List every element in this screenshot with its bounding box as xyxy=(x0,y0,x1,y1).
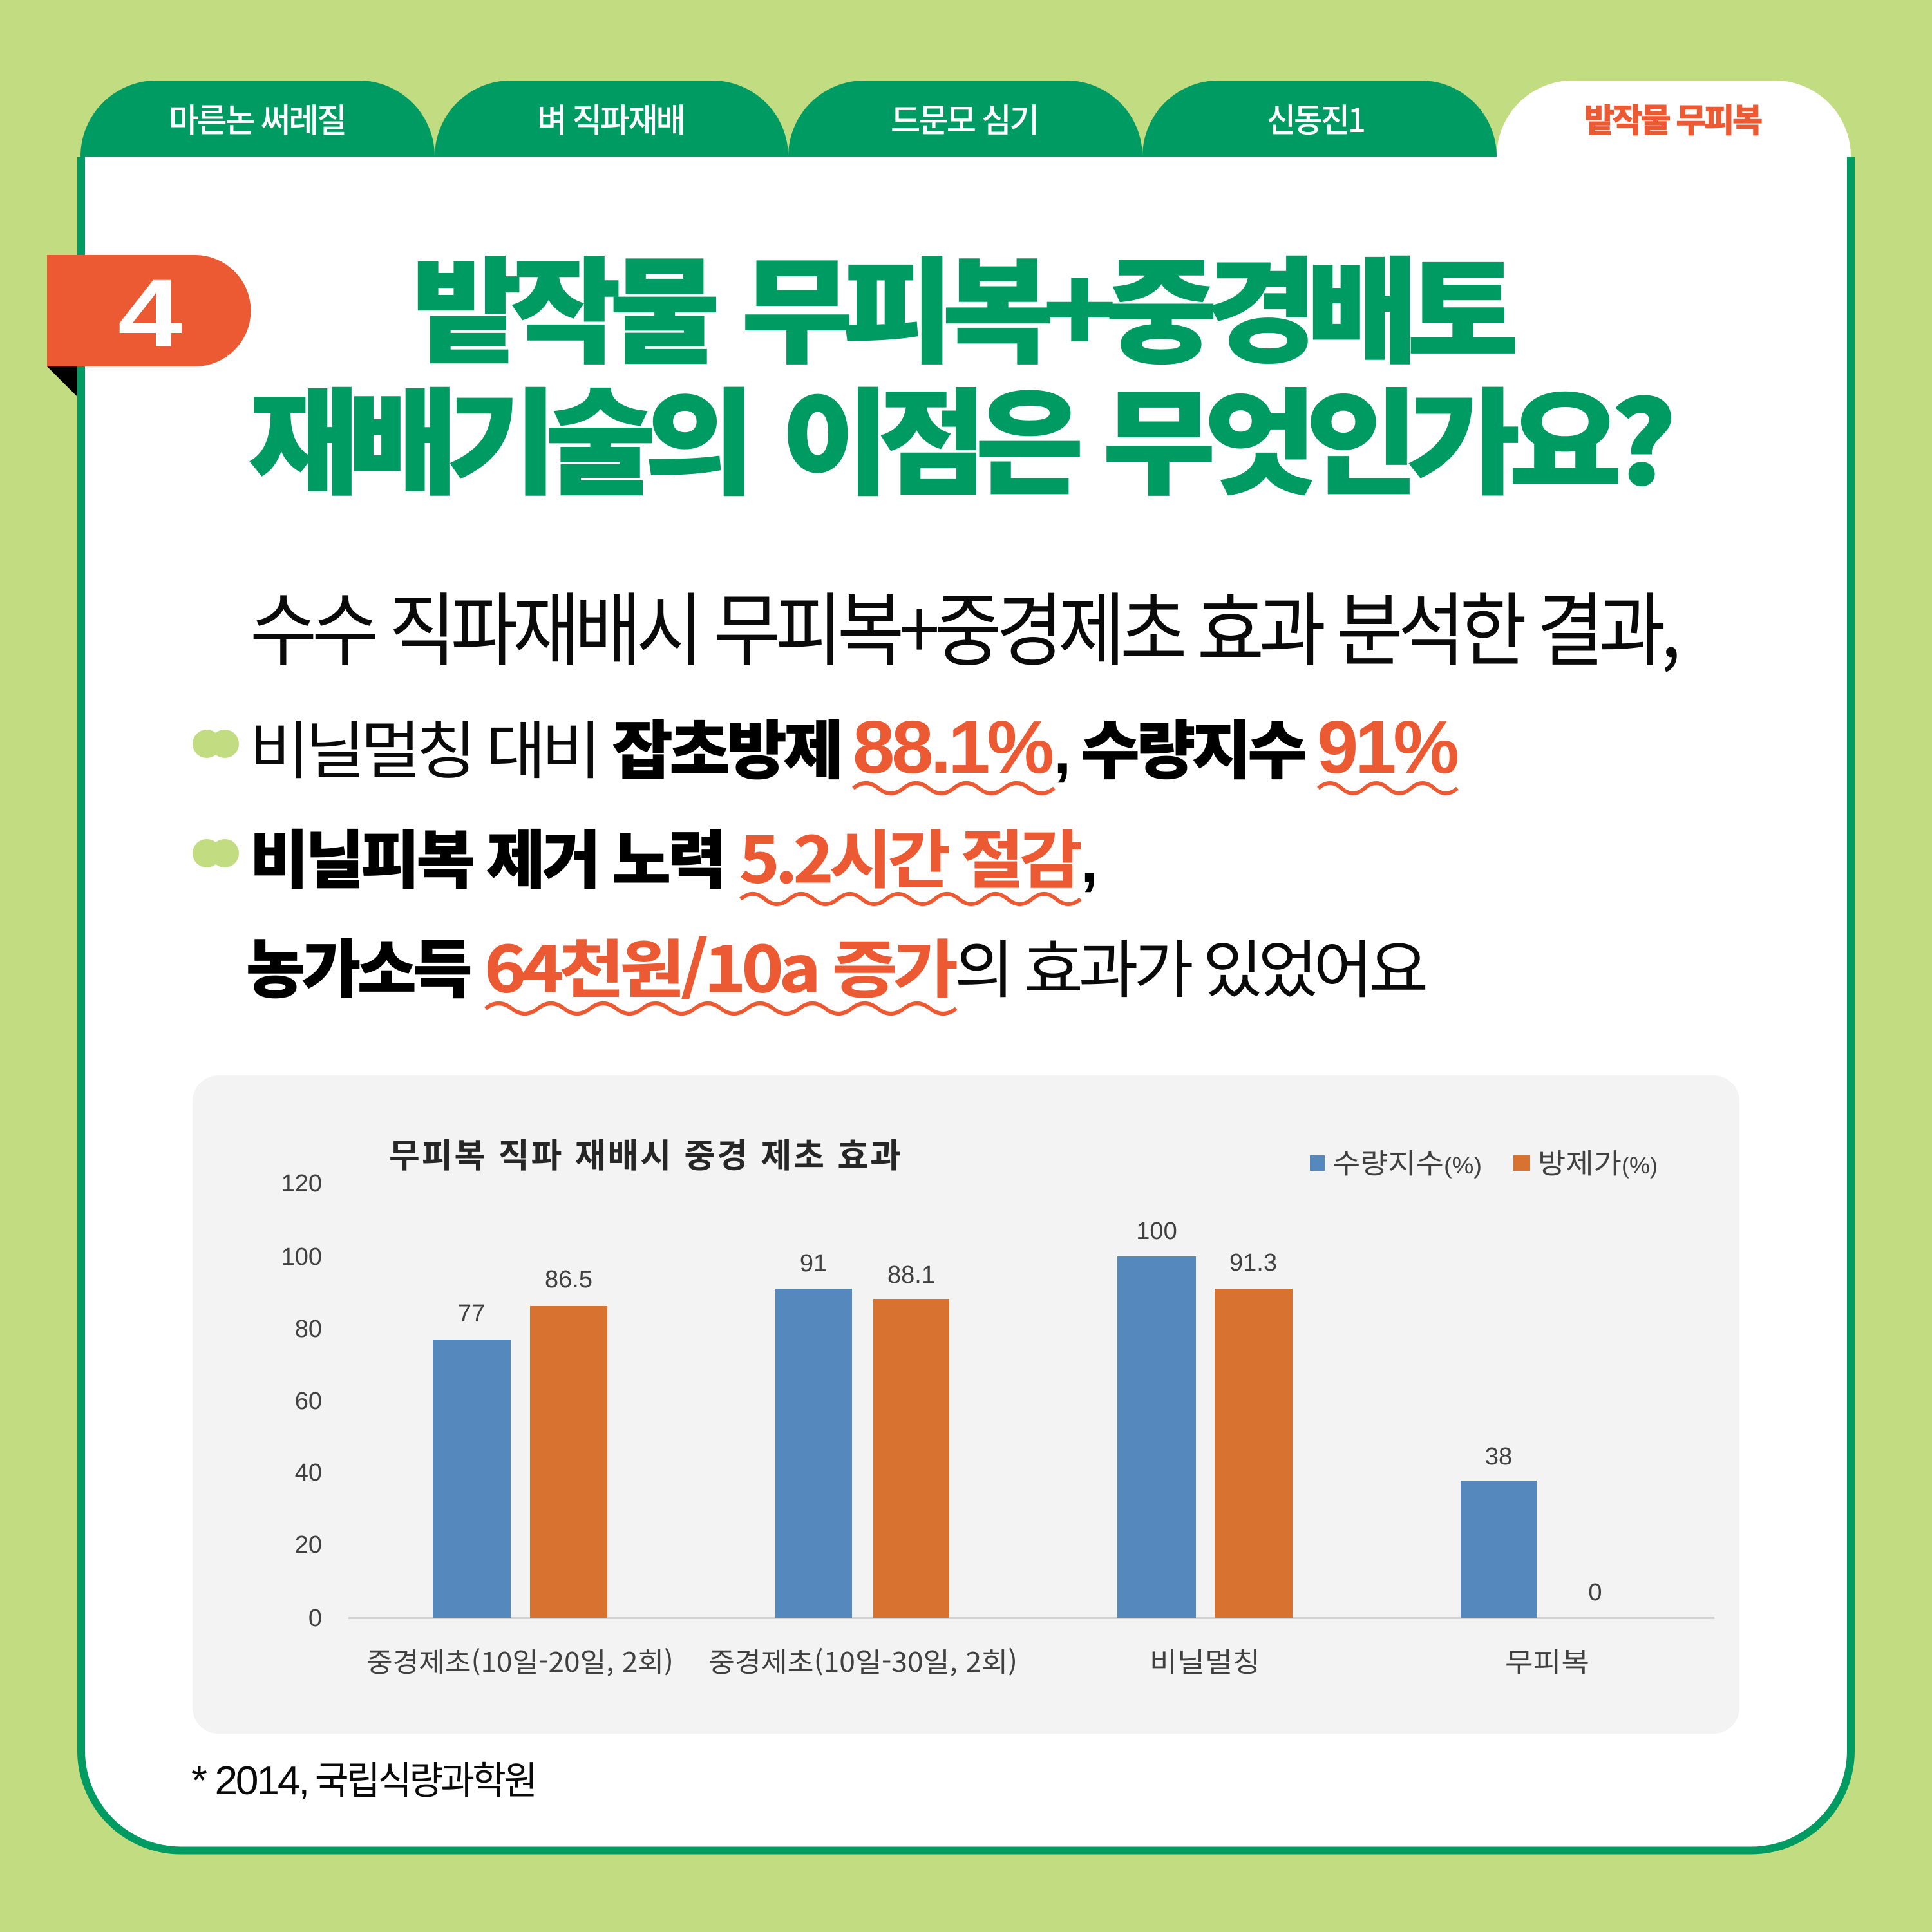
bullet line: 잡초방제 / 수량지수 xyxy=(193,700,1458,793)
value labels: 38 xyxy=(1485,1443,1512,1470)
tab: 신동진1 xyxy=(1142,80,1497,157)
title: 무피복+중경배토 xyxy=(742,221,1515,386)
text line: 농가소득 xyxy=(246,919,1426,1014)
bullet line: 잡초방제 / 수량지수: 88.1% xyxy=(853,705,1053,789)
bullet line: 비닐피복 제거 노력: 5.2시간 절감 xyxy=(739,810,1081,901)
footnote: 국립식량과학원 xyxy=(315,1750,535,1806)
tab: 드문모 심기: 드문모 심기 xyxy=(891,94,1037,142)
badge: number 4 xyxy=(47,255,251,397)
y axis labels: 60 xyxy=(295,1388,322,1415)
y axis labels: 0 xyxy=(308,1605,322,1632)
value labels: 77 xyxy=(458,1300,485,1327)
badge: number 4: 4 xyxy=(118,259,182,367)
text line: 농가소득: 농가소득 xyxy=(246,919,470,1010)
y axis labels: 80 xyxy=(295,1316,322,1343)
legend: 방제가 xyxy=(1538,1142,1622,1182)
text line: 농가소득: 64천원/10a 증가 xyxy=(484,919,956,1010)
category labels: 무피복 xyxy=(1505,1641,1589,1680)
wavy underline: 5.2시간 절감 xyxy=(741,894,1081,904)
bullet line: 잡초방제 / 수량지수: 비닐멀칭 대비 xyxy=(249,700,597,791)
bullet icon xyxy=(193,730,239,758)
title: 재배기술의 xyxy=(249,352,744,518)
title xyxy=(249,221,1671,518)
tab: 벼 직파재배 xyxy=(435,80,788,157)
title: 밭작물 xyxy=(412,221,716,386)
title: 이점은 xyxy=(782,352,1079,518)
bars: blue xyxy=(433,1256,1537,1618)
value labels: 88.1 xyxy=(887,1262,935,1289)
legend: 수량지수 xyxy=(1332,1142,1444,1182)
x axis line xyxy=(348,1617,1714,1619)
chart title: 무피복 직파 재배시 중경 제초 효과 xyxy=(389,1129,901,1177)
wavy underline: 88.1% xyxy=(853,783,1054,793)
value labels xyxy=(458,1218,1602,1606)
footnote xyxy=(191,1750,535,1806)
bullet line: 비닐피복 제거 노력: 비닐피복 제거 노력 xyxy=(250,810,723,901)
tab bar xyxy=(80,80,1851,157)
bullet line: 잡초방제 / 수량지수: , xyxy=(1054,715,1071,786)
legend xyxy=(1310,1142,1658,1182)
wavy underline: 91% xyxy=(1318,783,1457,793)
bars: orange xyxy=(530,1289,1293,1618)
bar chart xyxy=(281,1129,1714,1680)
y axis labels: 120 xyxy=(281,1170,322,1197)
tab: 드문모 심기 xyxy=(788,80,1142,157)
y axis labels: 20 xyxy=(295,1531,322,1558)
bullet line: 잡초방제 / 수량지수: 잡초방제 xyxy=(612,700,840,791)
legend: (%) xyxy=(1444,1152,1482,1179)
text line: 농가소득: 의 효과가 있었어요 xyxy=(954,919,1426,1010)
title: 무엇인가요? xyxy=(1103,352,1671,518)
tab: 발작물 무피복 (active) xyxy=(1497,80,1851,157)
tab: 마른논 써레질: 마른논 써레질 xyxy=(169,94,345,142)
bullet line: 잡초방제 / 수량지수: 91% xyxy=(1317,705,1458,789)
legend: (%) xyxy=(1622,1152,1658,1179)
tab: 벼 직파재배: 벼 직파재배 xyxy=(537,94,684,142)
intro text: 수수 직파재배시 무피복+중경제초 효과 분석한 결과, xyxy=(250,566,1677,682)
value labels: 91.3 xyxy=(1229,1249,1277,1276)
bullet icon xyxy=(193,839,239,867)
bullet line: 비닐피복 제거 노력 xyxy=(193,810,1098,904)
category labels: 중경제초(10일-20일, 2회) xyxy=(366,1641,674,1680)
tab: 마른논 써레질 xyxy=(80,80,435,157)
category labels: 비닐멀칭 xyxy=(1150,1641,1260,1680)
value labels: 0 xyxy=(1588,1579,1602,1606)
tab: 신동진1: 신동진1 xyxy=(1267,94,1364,142)
category labels: 중경제초(10일-30일, 2회) xyxy=(708,1641,1018,1680)
y axis labels: 100 xyxy=(281,1244,322,1271)
bullet line: 비닐피복 제거 노력: , xyxy=(1081,825,1098,896)
category labels xyxy=(366,1641,1589,1680)
wavy underline: 64천원/10a 증가 xyxy=(486,1003,956,1014)
y axis labels: 40 xyxy=(295,1459,322,1486)
value labels: 91 xyxy=(800,1250,827,1277)
footnote: * 2014, xyxy=(191,1759,308,1803)
value labels: 86.5 xyxy=(545,1266,592,1293)
tab: 발작물 무피복 (active): 밭작물 무피복 xyxy=(1584,94,1761,142)
y axis labels xyxy=(281,1170,322,1632)
bullet line: 잡초방제 / 수량지수: 수량지수 xyxy=(1081,700,1305,791)
panel: chart background xyxy=(193,1075,1739,1734)
value labels: 100 xyxy=(1136,1218,1177,1245)
